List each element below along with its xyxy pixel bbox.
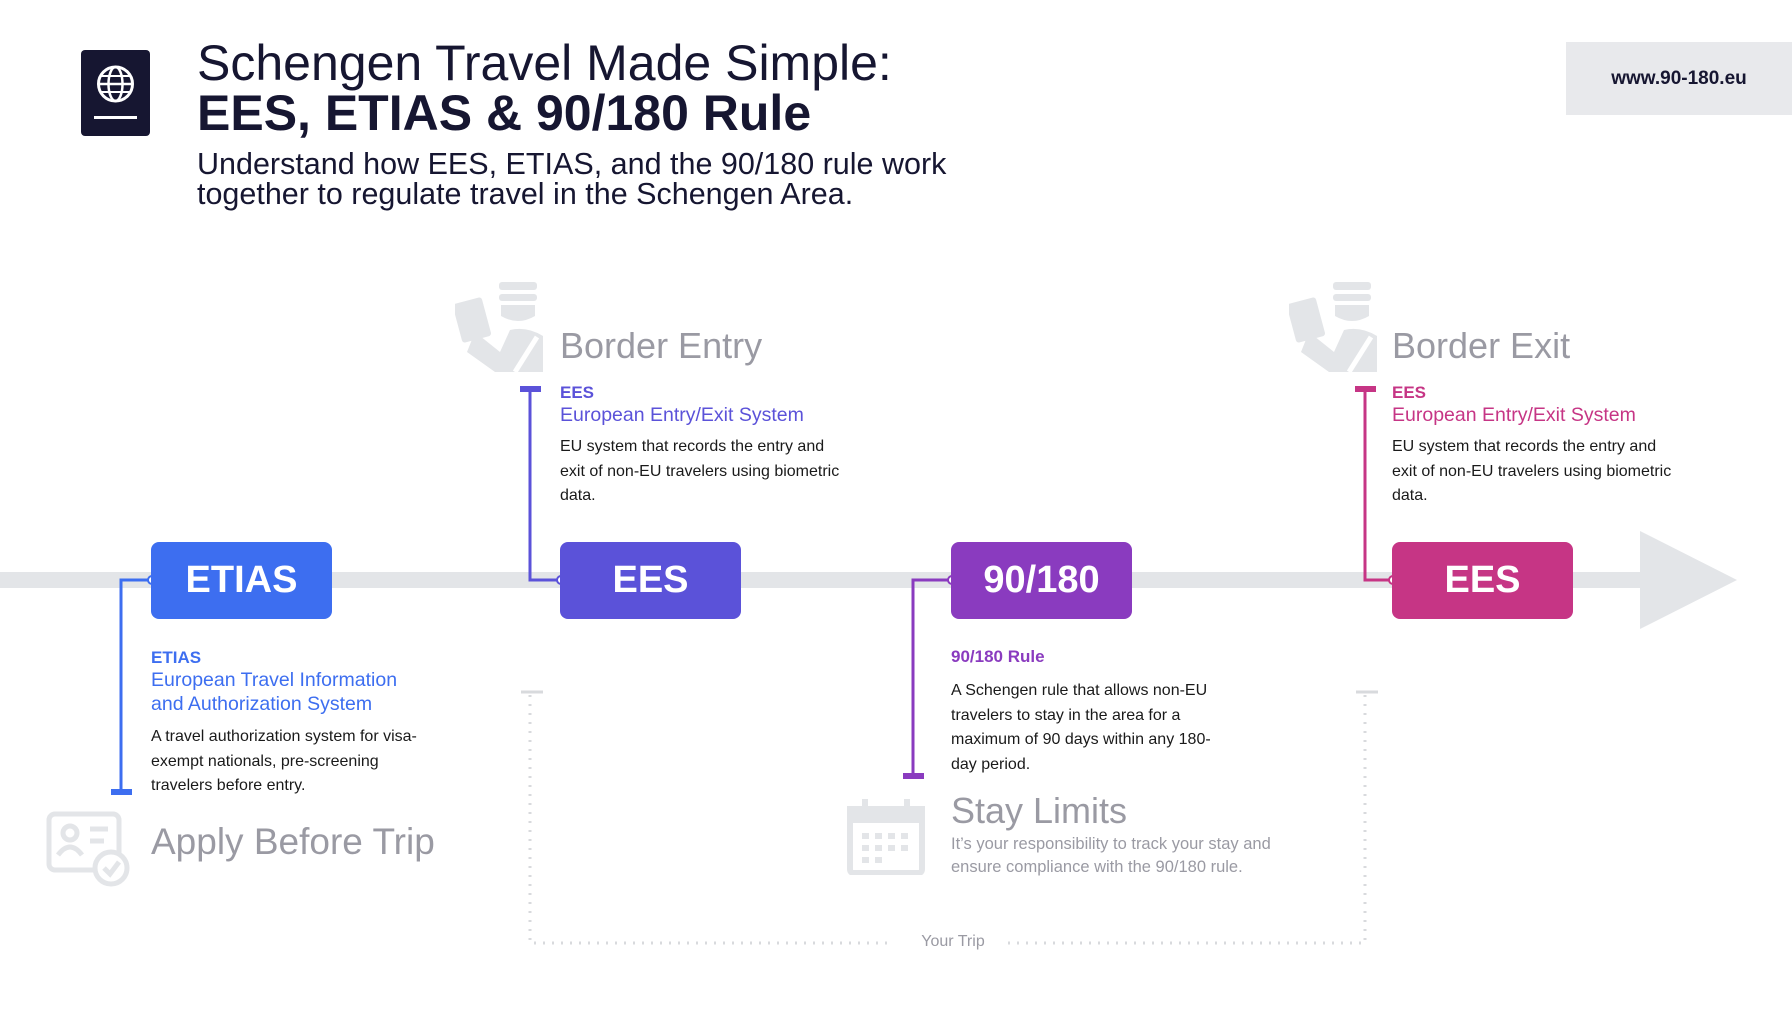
icon: calendar [847,799,925,875]
text block: EES exit: EU system that records the entry and [1392,438,1656,455]
text block: 90/180 rule: 90/180 Rule [951,647,1045,666]
text block: EES entry: data. [560,487,596,504]
text block: ETIAS: exempt nationals, pre-screening [151,752,379,770]
text block: EES exit [1392,383,1671,504]
text block: 90/180 rule: maximum of 90 days within any 180- [951,731,1211,748]
subtitle: together to regulate travel in the Schengen Area. [197,177,853,211]
text block: EES exit: data. [1392,487,1428,504]
text block: EES entry: European Entry/Exit System [560,404,804,426]
title: EES, ETIAS & 90/180 Rule [197,85,811,141]
label: your trip: Your Trip [921,933,985,950]
subtitle [197,147,946,211]
text block: ETIAS: European Travel Information [151,669,397,691]
text: stay limits description: It’s your responsibility to track your stay and [951,835,1271,853]
text block: EES entry: EU system that records the entry and [560,438,824,455]
heading: border exit: Border Exit [1392,325,1570,366]
text: stay limits description [951,835,1271,876]
text block: ETIAS: travelers before entry. [151,777,305,794]
title [197,35,892,141]
url badge [1566,42,1792,115]
icon: application form [46,812,130,886]
title: Schengen Travel Made Simple: [197,35,892,91]
text block: EES exit: European Entry/Exit System [1392,404,1636,426]
text block: 90/180 rule [951,647,1211,772]
box: 90/180: 90/180 [983,559,1100,601]
box: EES entry: EES [612,559,689,601]
box: EES entry [560,542,741,619]
text block: 90/180 rule: travelers to stay in the area for a [951,706,1180,724]
text block: 90/180 rule: day period. [951,756,1030,772]
timeline bar with arrow [0,531,1736,629]
box: EES exit: EES [1444,559,1521,601]
subtitle: Understand how EES, ETIAS, and the 90/180 rule work [197,147,946,181]
box: ETIAS [151,542,332,619]
text block: EES exit: EES [1392,383,1426,402]
url badge: www.90-180.eu [1611,68,1747,88]
connectors [111,386,1392,795]
text block: EES entry: exit of non-EU travelers using biometric [560,462,839,480]
text block: ETIAS: and Authorization System [151,693,372,715]
box: 90/180 [951,542,1132,619]
text: stay limits description: ensure compliance with the 90/180 rule. [951,858,1243,876]
logo: passport icon [81,50,150,136]
text block: EES entry [560,383,839,504]
icon: border officer exit [1289,282,1377,372]
text block: ETIAS: A travel authorization system for visa- [151,728,417,745]
text block: ETIAS: ETIAS [151,648,201,667]
text block: EES entry: EES [560,383,594,402]
box: EES exit [1392,542,1573,619]
icon: border officer entry [455,282,543,372]
text block: ETIAS [151,648,417,794]
text block: 90/180 rule: A Schengen rule that allows non-EU [951,682,1207,699]
box: ETIAS: ETIAS [186,559,297,601]
dotted trip bracket [521,690,1378,944]
heading: apply before trip: Apply Before Trip [151,821,435,862]
text block: EES exit: exit of non-EU travelers using biometric [1392,462,1671,480]
heading: border entry: Border Entry [560,325,762,366]
heading: stay limits: Stay Limits [951,790,1127,831]
